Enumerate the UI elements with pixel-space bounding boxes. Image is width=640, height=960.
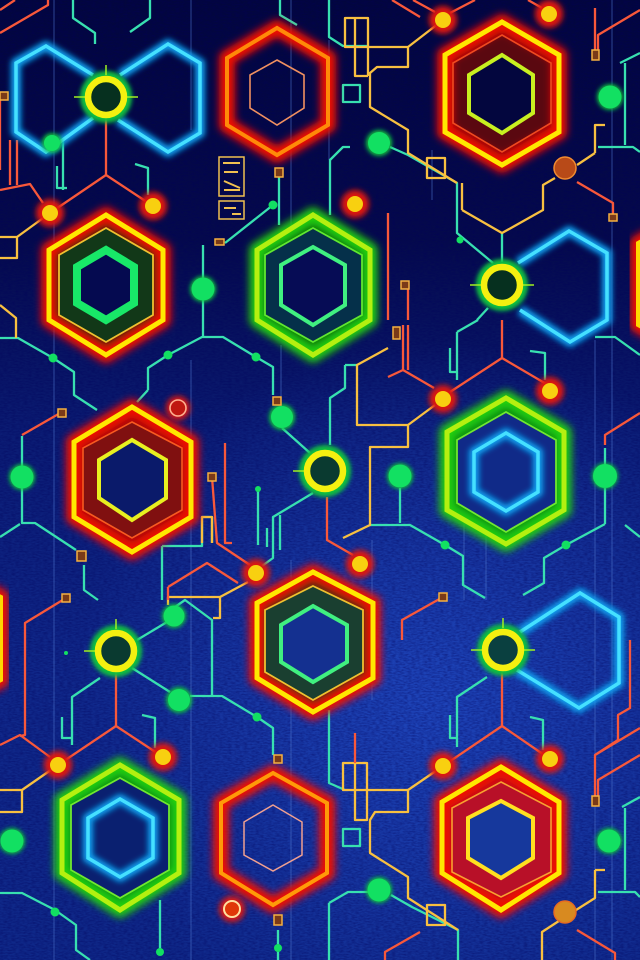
hexagon: yellow and green second row left bbox=[49, 215, 163, 355]
hexagon: red yellow fifth row right bbox=[442, 767, 559, 910]
microchip block icon bbox=[219, 157, 244, 219]
yellow junction nodes with red halo bbox=[36, 0, 564, 780]
hexagon: cyan right of first ring bbox=[118, 44, 200, 152]
hexagon: green and cyan third row right bbox=[447, 398, 564, 544]
hexagon: green second row centre bbox=[257, 215, 370, 355]
hexagon: yellow and green fourth row centre bbox=[257, 572, 373, 712]
red ring nodes bbox=[166, 396, 245, 922]
hexagon: red thin top centre bbox=[227, 28, 328, 155]
hexagon: green and cyan fifth row left bbox=[62, 765, 179, 910]
hexagon: red yellow top right bbox=[445, 22, 559, 165]
hexagon: cyan fourth row right bbox=[517, 593, 619, 708]
ring node: row four left bbox=[84, 619, 142, 677]
ring node: row three centre bbox=[293, 445, 351, 497]
hexagon: cyan second row right bbox=[518, 231, 607, 342]
ring node: row two right bbox=[470, 259, 534, 311]
ring node: row one left bbox=[74, 65, 138, 123]
hexagon: red partial at right edge bbox=[638, 228, 640, 340]
hexagon: red thin fifth row centre bbox=[221, 773, 327, 905]
ring node: row four right bbox=[471, 618, 535, 676]
hexagon: red yellow third row left bbox=[74, 407, 191, 552]
orange circuit chip nodes bbox=[554, 157, 576, 923]
hexagon: cyan left bbox=[16, 46, 93, 152]
hexagon: red partial at left edge bbox=[0, 583, 1, 694]
